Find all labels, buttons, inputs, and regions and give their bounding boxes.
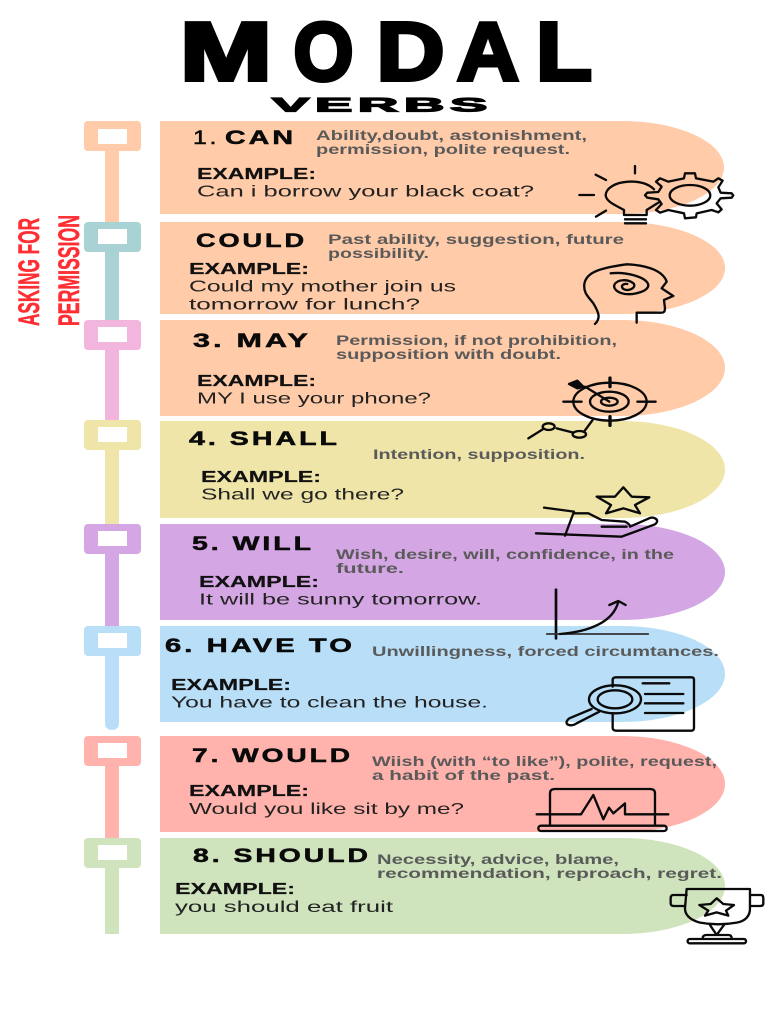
panel: may <box>160 320 725 416</box>
title: M <box>180 6 272 98</box>
panel: have to <box>160 626 725 722</box>
panel: shall: Shall we go there? <box>201 486 404 504</box>
panel: should: EXAMPLE: <box>175 881 295 898</box>
panel: can <box>160 121 724 214</box>
panel: will: 5. WILL <box>192 534 314 555</box>
panel: will <box>160 524 725 620</box>
icon: head with spiral <box>584 264 673 324</box>
icon: trophy with star <box>671 889 763 943</box>
panel: would: a habit of the past. <box>372 768 555 783</box>
side label: asking for permission <box>13 215 86 326</box>
icon: laptop with pulse <box>537 789 668 831</box>
panel: should: 8. SHOULD <box>193 846 371 867</box>
panel: will: future. <box>336 561 404 576</box>
panel: could <box>160 222 725 314</box>
panel: may: Permission, if not prohibition, <box>336 333 617 348</box>
panel: shall: EXAMPLE: <box>201 469 321 486</box>
icon: growth chart <box>547 590 648 638</box>
panel: would: EXAMPLE: <box>189 783 309 800</box>
icon: target with arrow <box>528 378 656 438</box>
panel: can: Can i borrow your black coat? <box>197 184 534 200</box>
side label: asking for permission: PERMISSION <box>53 215 86 326</box>
title <box>180 6 592 98</box>
panel: could: Could my mother join us <box>189 278 456 296</box>
panel: can: permission, polite request. <box>316 142 570 157</box>
panel: would: Would you like sit by me? <box>189 801 464 818</box>
panel: could: Past ability, suggestion, future <box>328 232 625 247</box>
title: A <box>457 6 519 98</box>
panel: could: possibility. <box>328 246 429 261</box>
panel: can: EXAMPLE: <box>197 166 316 183</box>
panel: can: 1. <box>193 128 219 149</box>
subtitle: VERBS <box>272 94 493 116</box>
panel: have to: You have to clean the house. <box>171 694 488 712</box>
panel: would: Wiish (with “to like”), polite, request, <box>372 754 717 769</box>
panel: should <box>160 838 725 934</box>
panel: have to: Unwillingness, forced circumtances. <box>372 644 719 659</box>
panel: have to: EXAMPLE: <box>171 677 291 694</box>
panel: would <box>160 736 725 832</box>
panel: will: EXAMPLE: <box>199 574 319 591</box>
panel: should: recommendation, reproach, regret. <box>377 866 722 881</box>
panel: would: 7. WOULD <box>192 746 353 767</box>
title: O <box>294 6 354 98</box>
panel: should: Necessity, advice, blame, <box>377 852 619 867</box>
panel: can: Ability,doubt, astonishment, <box>316 128 587 143</box>
panel: have to: 6. HAVE TO <box>165 636 355 657</box>
panel: should: you should eat fruit <box>175 899 394 916</box>
panel: shall: 4. SHALL <box>189 429 340 450</box>
title: D <box>376 6 444 98</box>
panel: will: It will be sunny tomorrow. <box>199 592 482 608</box>
timeline <box>84 121 141 934</box>
panel: may: supposition with doubt. <box>336 347 561 362</box>
title: L <box>536 6 592 98</box>
panel: may: 3. MAY <box>193 331 311 352</box>
side label: asking for permission: ASKING FOR <box>13 218 46 326</box>
panel: can: CAN <box>225 128 296 149</box>
icon: light bulb and gear <box>579 166 733 223</box>
icon: hand holding star <box>536 487 657 537</box>
panel: could: COULD <box>196 231 307 252</box>
panel: could: tomorrow for lunch? <box>189 296 420 314</box>
panel: will: Wish, desire, will, confidence, in the <box>336 547 675 562</box>
panel: shall: Intention, supposition. <box>373 447 585 462</box>
panel: may: MY I use your phone? <box>197 390 431 408</box>
icon: magnifier over document <box>567 677 694 731</box>
panel: may: EXAMPLE: <box>197 373 316 390</box>
panel: shall <box>160 421 725 518</box>
panel: could: EXAMPLE: <box>189 261 309 278</box>
